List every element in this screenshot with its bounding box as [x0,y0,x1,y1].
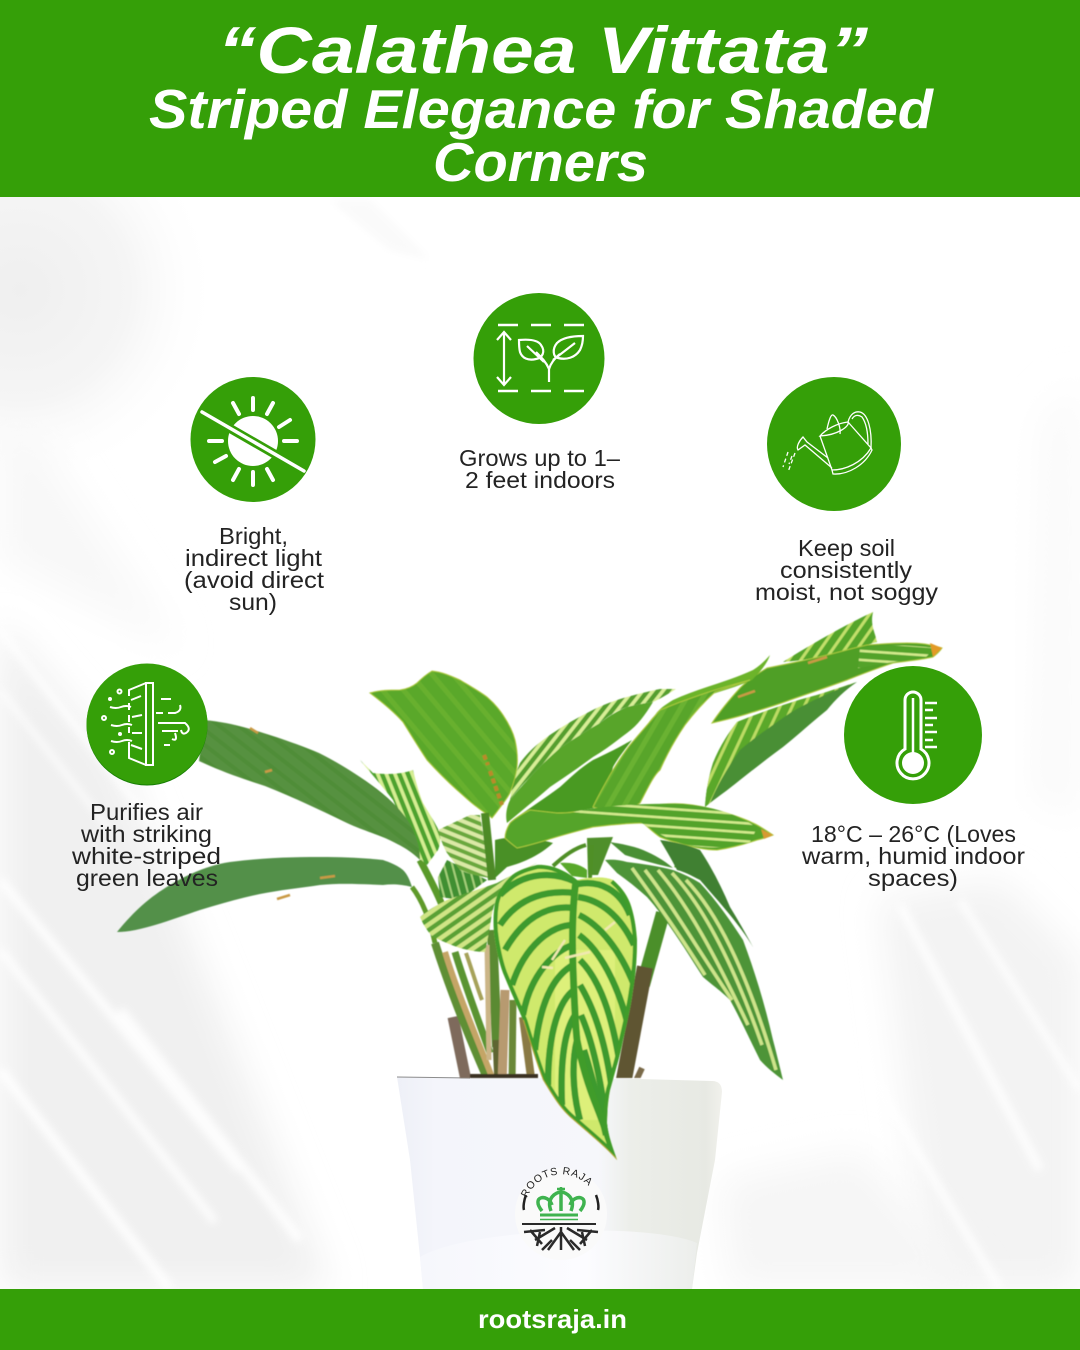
icon: thermometer [844,666,982,804]
crown [538,1187,584,1220]
leaf blemishes [250,657,827,899]
leaf: thin strip behind big leaf [640,655,770,742]
text: temperature: 18°C – 26°C (Loves [811,821,1016,847]
footer band [0,1289,1080,1350]
title: Corners [433,131,648,193]
plant [117,612,942,1165]
icon: plant height [474,293,604,424]
feature: height [459,293,620,493]
leaf tip [761,829,773,839]
leaf: small striped inner [438,815,490,878]
text: air: with striking [80,821,212,847]
leaf: small striped left [360,760,440,865]
text: air: Purifies air [90,799,203,825]
leaf: right lower dark [705,682,857,807]
ring marks [524,1195,598,1210]
leaf: right striped [600,855,790,1085]
leaf tip [930,643,942,657]
pot [397,1077,722,1289]
text: temperature [801,821,1025,891]
leaf: dark striped low inner [438,860,487,900]
small light leaf [560,863,587,878]
text: light: indirect light [185,545,323,571]
leaf: horizontal striped pattern [573,804,757,847]
text: air [71,799,221,891]
text: height: 2 feet indoors [465,467,615,493]
leaf wedge under centre [587,837,613,875]
petiole [485,813,492,880]
text: light: (avoid direct [184,567,325,593]
leaf: striped upper mid [510,689,676,800]
text: light: sun) [229,589,277,615]
icon: crossed-out sun [190,377,316,502]
leaf: lower left [117,857,412,932]
leaf: horizontal striped [505,804,773,850]
leaf blemish spots [484,755,502,805]
website: rootsraja.in [478,1304,627,1334]
leaf: long right striped tip [858,645,935,668]
leaf: main striped [490,860,640,1165]
title: Striped Elegance for Shaded [149,78,934,140]
text: water: consistently [780,557,913,583]
leaf: plain fold of striped leaf [506,702,653,823]
leaf: dark behind right [660,840,753,947]
roots [522,1224,598,1250]
text: light [184,523,325,615]
feature: temperature [801,666,1025,891]
header band [0,0,1080,197]
petioles [553,845,592,878]
leaf: long left [199,720,420,860]
feature: water [755,377,939,605]
brand name: ROOTS RAJA [520,1167,592,1198]
text: water [755,535,939,605]
leaf: dark green mid [517,740,632,817]
stems [410,859,676,1079]
text: temperature: warm, humid indoor [801,843,1025,869]
leaf: big plain top center [370,671,517,818]
title [149,13,934,193]
leaf: dark thin strip [610,842,673,868]
leaf: right lower striped strip [705,682,857,807]
text: water: Keep soil [798,535,895,561]
leaf: long right [712,643,942,723]
leaf: big green upward [593,680,750,812]
title: “Calathea Vittata” [218,13,868,87]
text: height: Grows up to 1– [459,445,620,471]
text: air: white-striped [71,843,221,869]
text: temperature: spaces) [868,865,958,891]
text: water: moist, not soggy [755,579,939,605]
sticker [520,1167,600,1251]
leaf dark behind petioles [495,837,553,878]
leaf: left lower striped [420,863,537,952]
feature: air [71,664,221,891]
text: air: green leaves [76,865,218,891]
icon: air purifier [86,664,208,786]
text: light: Bright, [219,523,288,549]
icon: watering can [767,377,901,511]
leaf: top right striped [783,612,877,662]
text: height [459,445,620,493]
feature: light [184,377,325,615]
